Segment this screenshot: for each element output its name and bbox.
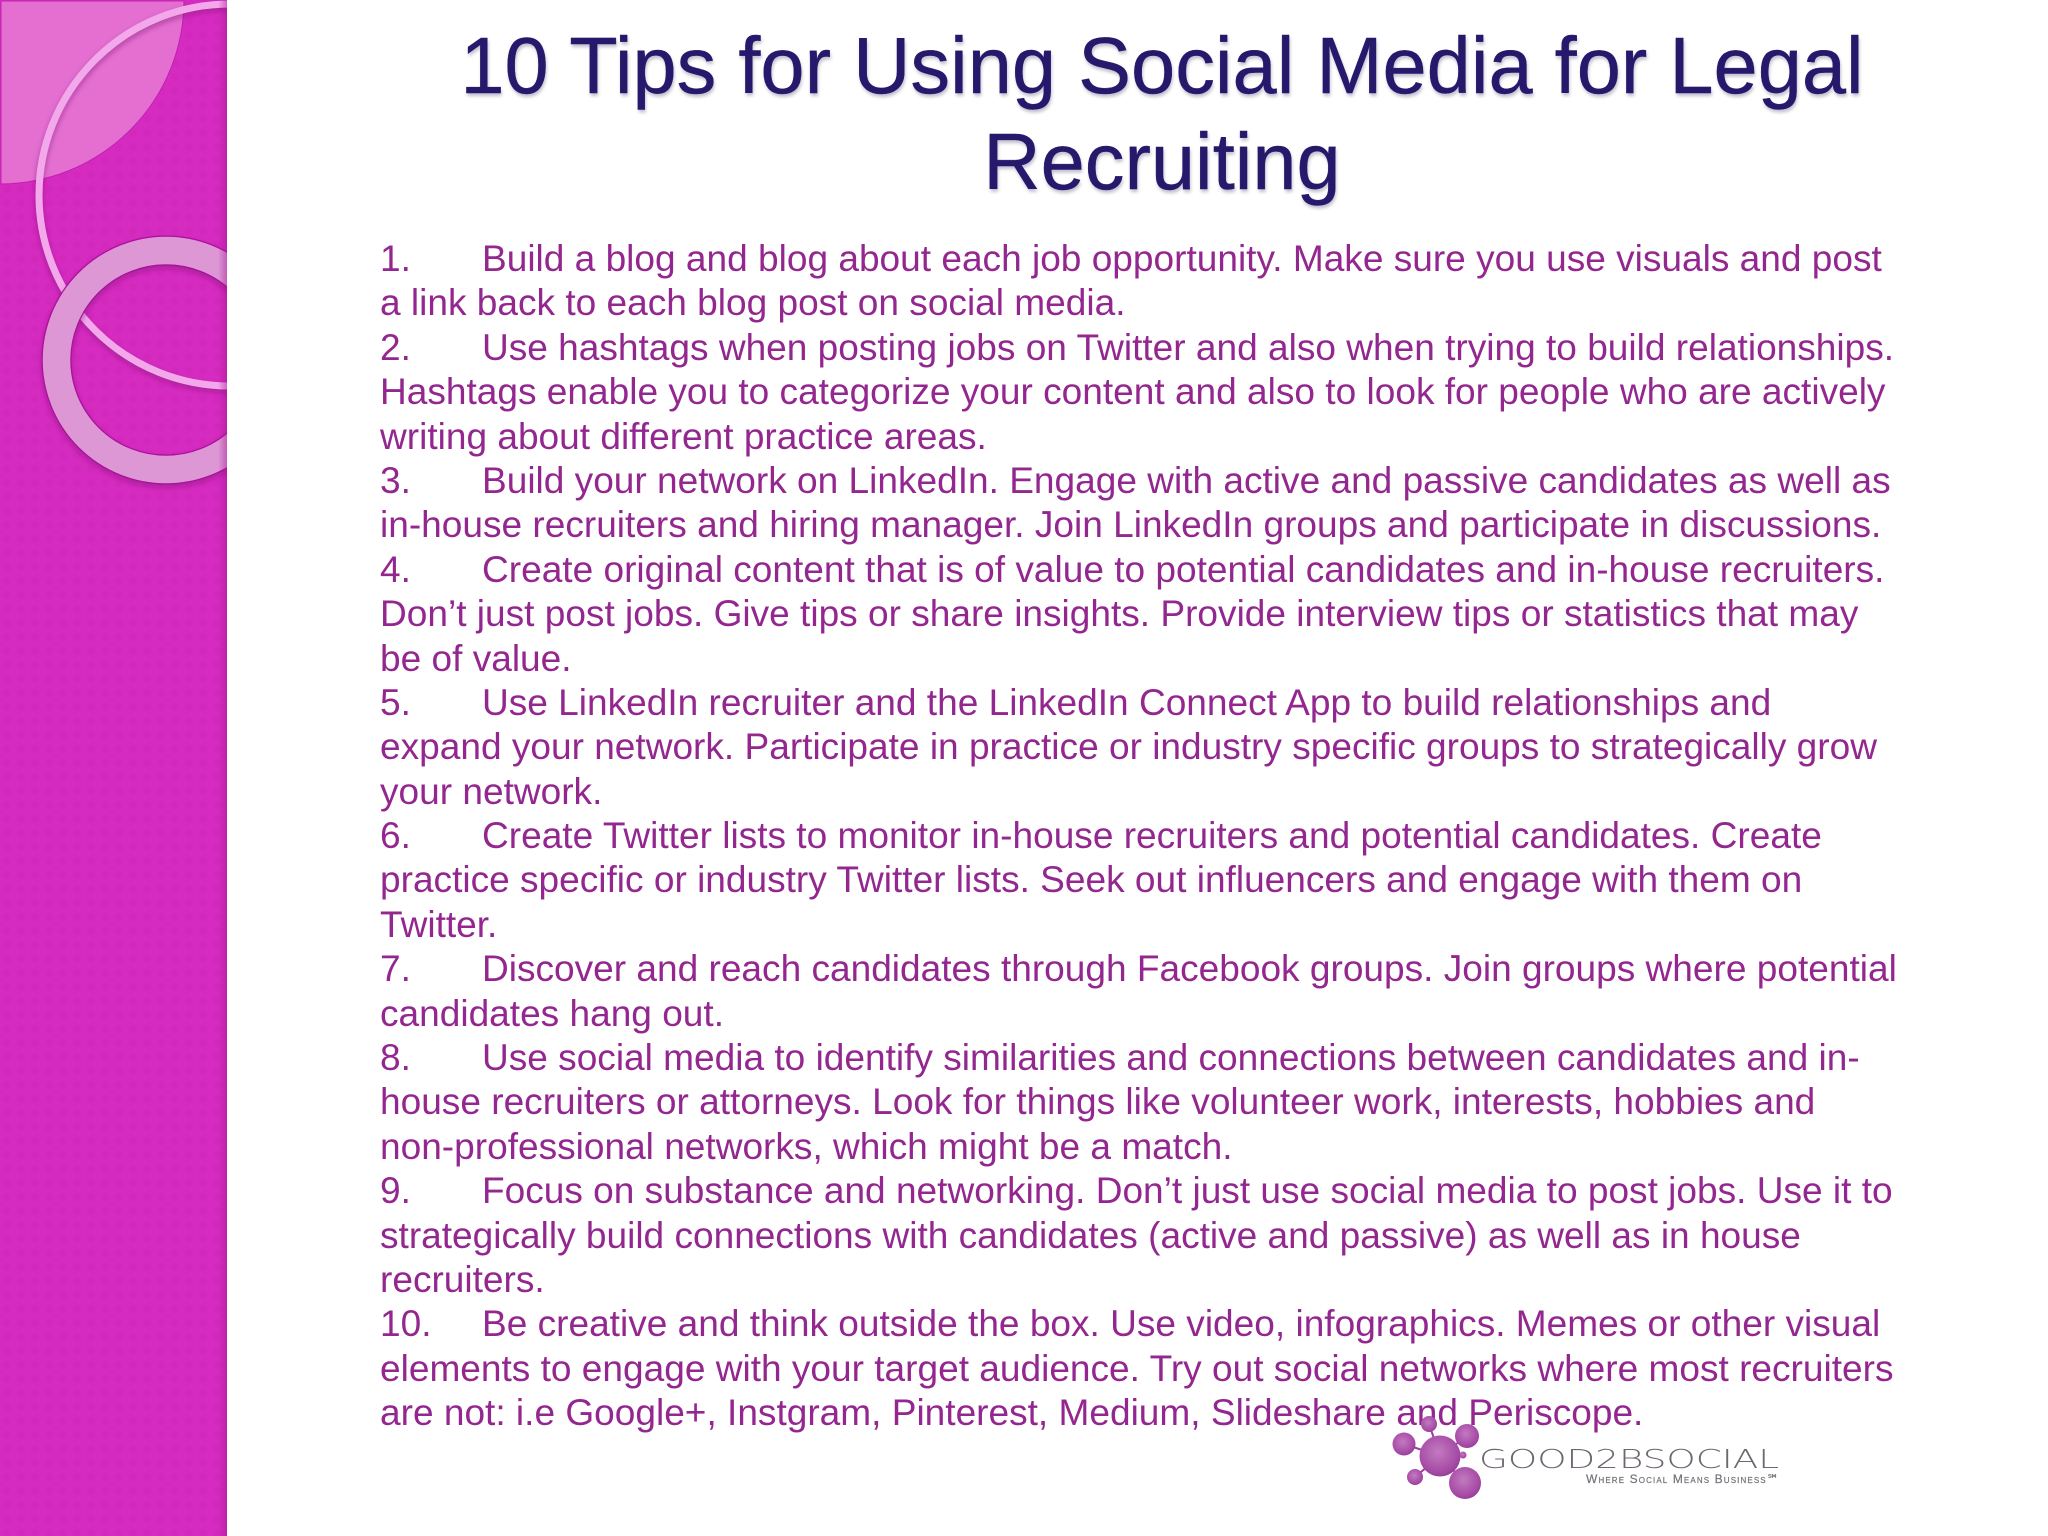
thin ring: [39, 4, 421, 386]
tip 5: [380, 681, 1878, 812]
tip 10: Be creative and think outside the box. Use video, infographics. Memes or other visual: [482, 1302, 1880, 1344]
tip 4: [380, 548, 1884, 679]
text block: list of ten tips: [380, 237, 1897, 1433]
tip 2: Use hashtags when posting jobs on Twitter and also when trying to build relationships.: [482, 326, 1894, 368]
tip 5: 5.: [380, 681, 411, 723]
tip 9: 9.: [380, 1169, 411, 1211]
tip 9: strategically build connections with candidates (active and passive) as well as in house: [380, 1214, 1801, 1256]
tip 10: elements to engage with your target audience. Try out social networks where most recruiters: [380, 1347, 1893, 1389]
tip 8: Use social media to identify similarities and connections between candidates and in-: [482, 1036, 1860, 1078]
tip 10: are not: i.e Google+, Instgram, Pinterest, Medium, Slideshare and Periscope.: [380, 1391, 1643, 1433]
tip 7: [380, 947, 1897, 1034]
tip 8: 8.: [380, 1036, 411, 1078]
tip 9: [380, 1169, 1893, 1300]
icon: molecule: [1392, 1416, 1481, 1499]
logo tagline: Where Social Means Business℠: [1586, 1472, 1779, 1486]
tip 1: a link back to each blog post on social media.: [380, 281, 1126, 323]
tip 6: 6.: [380, 814, 411, 856]
title: [460, 21, 1864, 210]
tip 3: [380, 459, 1891, 545]
thick ring: [56, 250, 276, 470]
tip 8: house recruiters or attorneys. Look for things like volunteer work, interests, hobbies and: [380, 1080, 1815, 1122]
tip 3: Build your network on LinkedIn. Engage with active and passive candidates as well as: [482, 459, 1891, 501]
title: 10 Tips for Using Social Media for Legal: [460, 21, 1864, 110]
title: Recruiting: [983, 117, 1341, 206]
tip 8: non-professional networks, which might be a match.: [380, 1125, 1232, 1167]
tip 3: 3.: [380, 459, 411, 501]
tip 7: 7.: [380, 947, 411, 989]
tip 6: Twitter.: [380, 903, 497, 945]
tip 6: practice specific or industry Twitter lists. Seek out influencers and engage with them on: [380, 858, 1802, 900]
tip 7: Discover and reach candidates through Facebook groups. Join groups where potential: [482, 947, 1897, 989]
tip 1: 1.: [380, 237, 411, 279]
tip 4: be of value.: [380, 637, 572, 679]
tip 2: writing about different practice areas.: [380, 415, 987, 457]
tip 1: [380, 237, 1882, 323]
tip 9: recruiters.: [380, 1258, 545, 1300]
tip 2: 2.: [380, 326, 411, 368]
tip 5: your network.: [380, 770, 602, 812]
tip 7: candidates hang out.: [380, 992, 724, 1034]
tip 10: [380, 1302, 1893, 1433]
tip 6: Create Twitter lists to monitor in-house recruiters and potential candidates. Create: [482, 814, 1822, 856]
tip 2: Hashtags enable you to categorize your content and also to look for people who are actively: [380, 370, 1885, 412]
tip 5: Use LinkedIn recruiter and the LinkedIn Connect App to build relationships and: [482, 681, 1771, 723]
tip 2: [380, 326, 1894, 457]
quarter circle highlight: [1, 1, 184, 184]
logo: Good2BSocial: [1392, 1416, 1779, 1499]
tip 10: 10.: [380, 1302, 432, 1344]
panel: decorative magenta sidebar: [0, 0, 227, 1536]
tip 8: [380, 1036, 1860, 1167]
tip 5: expand your network. Participate in practice or industry specific groups to strategically grow: [380, 725, 1877, 767]
tip 4: 4.: [380, 548, 411, 590]
tip 4: Create original content that is of value to potential candidates and in-house recruiters.: [482, 548, 1884, 590]
tip 3: in-house recruiters and hiring manager. Join LinkedIn groups and participate in discussions.: [380, 503, 1881, 545]
tip 6: [380, 814, 1822, 945]
tip 9: Focus on substance and networking. Don’t just use social media to post jobs. Use it to: [482, 1169, 1893, 1211]
logo wordmark: GOOD2BSOCIAL: [1479, 1445, 1779, 1475]
tip 1: Build a blog and blog about each job opportunity. Make sure you use visuals and post: [482, 237, 1882, 279]
tip 4: Don’t just post jobs. Give tips or share insights. Provide interview tips or statistics that may: [380, 592, 1858, 634]
